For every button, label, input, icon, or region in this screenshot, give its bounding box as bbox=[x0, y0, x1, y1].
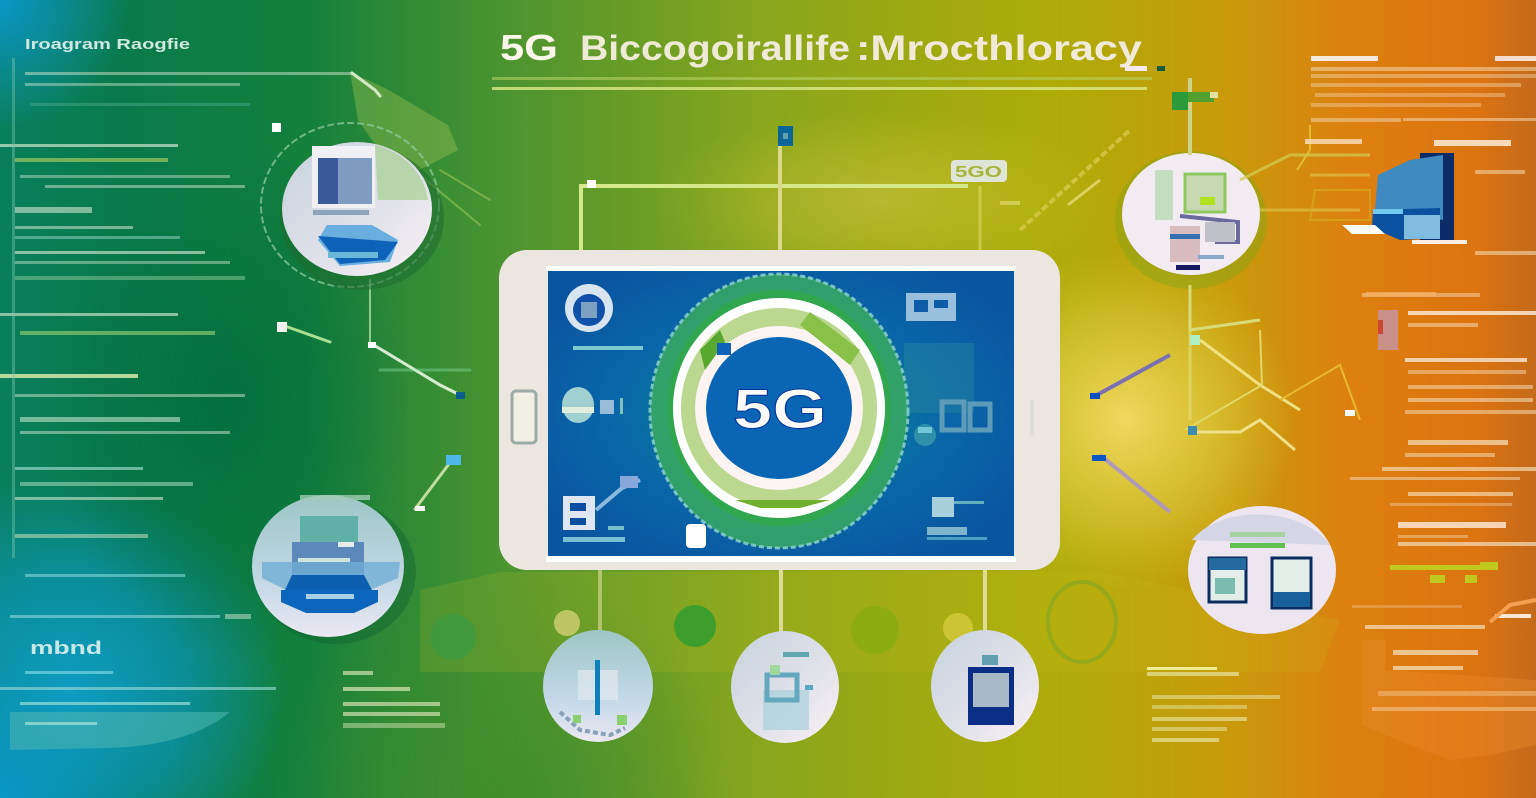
icon: blue screen right bbox=[1342, 153, 1467, 244]
label: 5GO: 5GO bbox=[955, 164, 1002, 181]
icon: bottom circle 1 bbox=[543, 630, 653, 742]
small green dots bbox=[430, 582, 1116, 662]
connector nodes: right bbox=[1090, 92, 1355, 461]
connector lines: phone bottom bbox=[600, 570, 985, 632]
panel: bottom left teal blob bbox=[10, 702, 230, 750]
icon: cloud bbox=[562, 387, 623, 423]
phone bbox=[499, 250, 1060, 570]
5G label: 5G bbox=[733, 377, 827, 440]
connector lines: phone top bbox=[581, 143, 1020, 252]
connector lines: right bbox=[1020, 78, 1370, 512]
icon: bottom left box bbox=[563, 476, 640, 542]
title bbox=[492, 27, 1165, 90]
text block: bottom right centre bbox=[1147, 667, 1280, 742]
icon: connector node bbox=[914, 424, 936, 446]
icon: server circle bottom left bbox=[252, 495, 416, 644]
heading: left top: Iroagram Raogfie bbox=[25, 36, 190, 53]
right text lines bbox=[1305, 56, 1536, 711]
screen icons bbox=[562, 284, 990, 548]
5G rings bbox=[650, 274, 908, 548]
title: :Mrocthloracy bbox=[856, 29, 1143, 68]
text block: bottom centre left bbox=[343, 671, 445, 728]
panel: left text column bbox=[0, 36, 352, 750]
connector lines: left bbox=[282, 73, 490, 509]
icon: right devices bbox=[942, 402, 990, 430]
side button bbox=[512, 391, 536, 443]
icon: monitor circle top right bbox=[1115, 151, 1267, 289]
label: 5GO bbox=[951, 160, 1007, 182]
icon: document circle right bbox=[1188, 506, 1336, 634]
icon: top node bbox=[778, 126, 793, 146]
chart: orange trend line bbox=[1490, 600, 1536, 622]
vertical rail bbox=[12, 58, 15, 558]
icon: small pink gadget bbox=[1366, 292, 1436, 350]
orange bottom blob bbox=[1362, 640, 1536, 760]
icon: top right chart bbox=[906, 293, 956, 321]
phone screen bbox=[548, 271, 1014, 556]
title: Biccogoirallife bbox=[580, 29, 850, 68]
icon: computer circle top left bbox=[261, 123, 444, 290]
icon: white node bbox=[686, 524, 706, 548]
icon: bottom right bars bbox=[927, 497, 987, 540]
icon: G badge bbox=[565, 284, 643, 350]
connector nodes: left bbox=[272, 123, 465, 511]
icon: bottom circle 2 bbox=[731, 631, 839, 743]
title: 5G bbox=[500, 27, 558, 68]
icon: bottom circle 3 bbox=[931, 630, 1039, 742]
panel: right text column bbox=[1305, 56, 1536, 760]
chart: green spark line bbox=[1390, 562, 1498, 583]
heading: left bottom: mbnd bbox=[30, 638, 102, 658]
left text lines bbox=[0, 72, 352, 690]
